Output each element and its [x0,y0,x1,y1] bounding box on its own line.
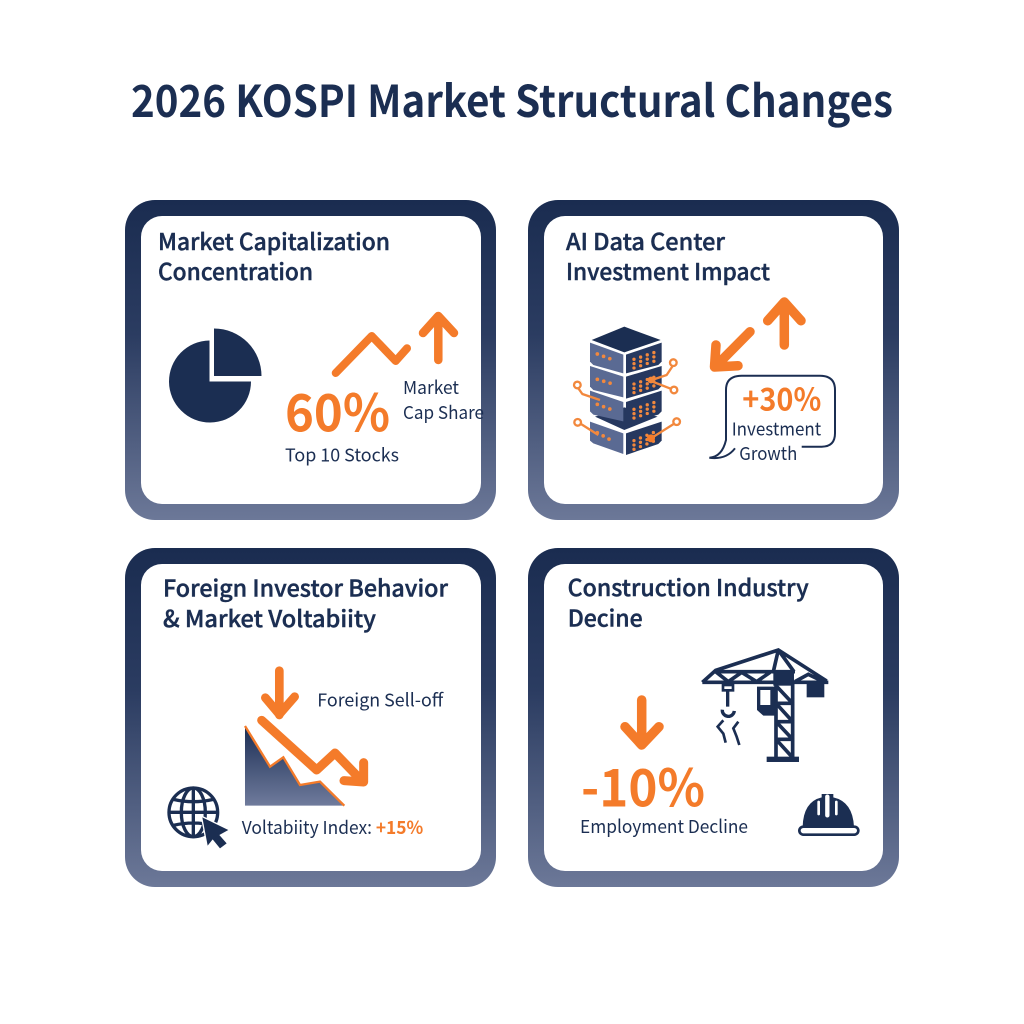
icon: falling trend arrow [262,720,364,782]
title: 2026 KOSPI Market Structural Changes [131,66,893,130]
heading: Foreign Investor Behavior [163,570,449,604]
label: employment decline: Employment Decline [580,813,748,839]
heading [568,569,809,634]
falling chart with arrows [245,671,364,806]
heading: Market Capitalization [158,223,390,257]
callout: investment growth [709,375,835,466]
card frame [125,200,496,520]
heading [566,223,770,287]
icon: globe with cursor [169,788,228,848]
panel: AI data center investment impact [528,200,899,520]
card frame [125,548,496,887]
icon: up arrow [423,316,454,360]
heading: Investment Impact [566,253,770,287]
label: investment growth [732,416,821,466]
card frame [528,200,899,520]
label: market cap share: Market [403,374,459,400]
panel: construction industry decline [528,548,899,887]
label: investment growth: Investment [732,416,821,442]
stat: 60%: 60% [285,372,390,446]
label: volatility index: Voltabiity Index: +15% [242,814,423,840]
panel: market capitalization concentration [125,200,496,520]
icon: down arrow [265,671,295,715]
stat: +30%: +30% [742,375,821,420]
icon: diagonal arrow [714,332,750,367]
icon: up arrow [768,302,801,345]
icon: rising trend line [336,336,407,373]
label: market cap share: Cap Share [403,399,484,425]
heading: Decine [568,600,643,634]
heading: AI Data Center [566,223,726,257]
icon: down arrow [625,700,659,745]
icon: server stack [574,327,680,455]
heading [163,570,449,634]
label: top 10 stocks: Top 10 Stocks [285,442,399,468]
icon: hard hat [799,794,858,835]
label: investment growth: Growth [739,440,797,466]
area chart [245,726,344,806]
icon: tower crane [702,650,828,762]
speech bubble outline [709,376,835,458]
label: foreign sell-off: Foreign Sell-off [317,687,445,713]
heading: Concentration [158,253,313,287]
label: market cap share [403,374,484,425]
card frame [528,548,899,887]
heading: Construction Industry [568,569,809,603]
heading: & Market Voltabiity [163,600,376,634]
icon: pie chart [169,328,262,422]
panel: foreign investor behavior and volatility [125,548,496,887]
stat: -10%: -10% [581,747,705,822]
heading [158,223,390,287]
